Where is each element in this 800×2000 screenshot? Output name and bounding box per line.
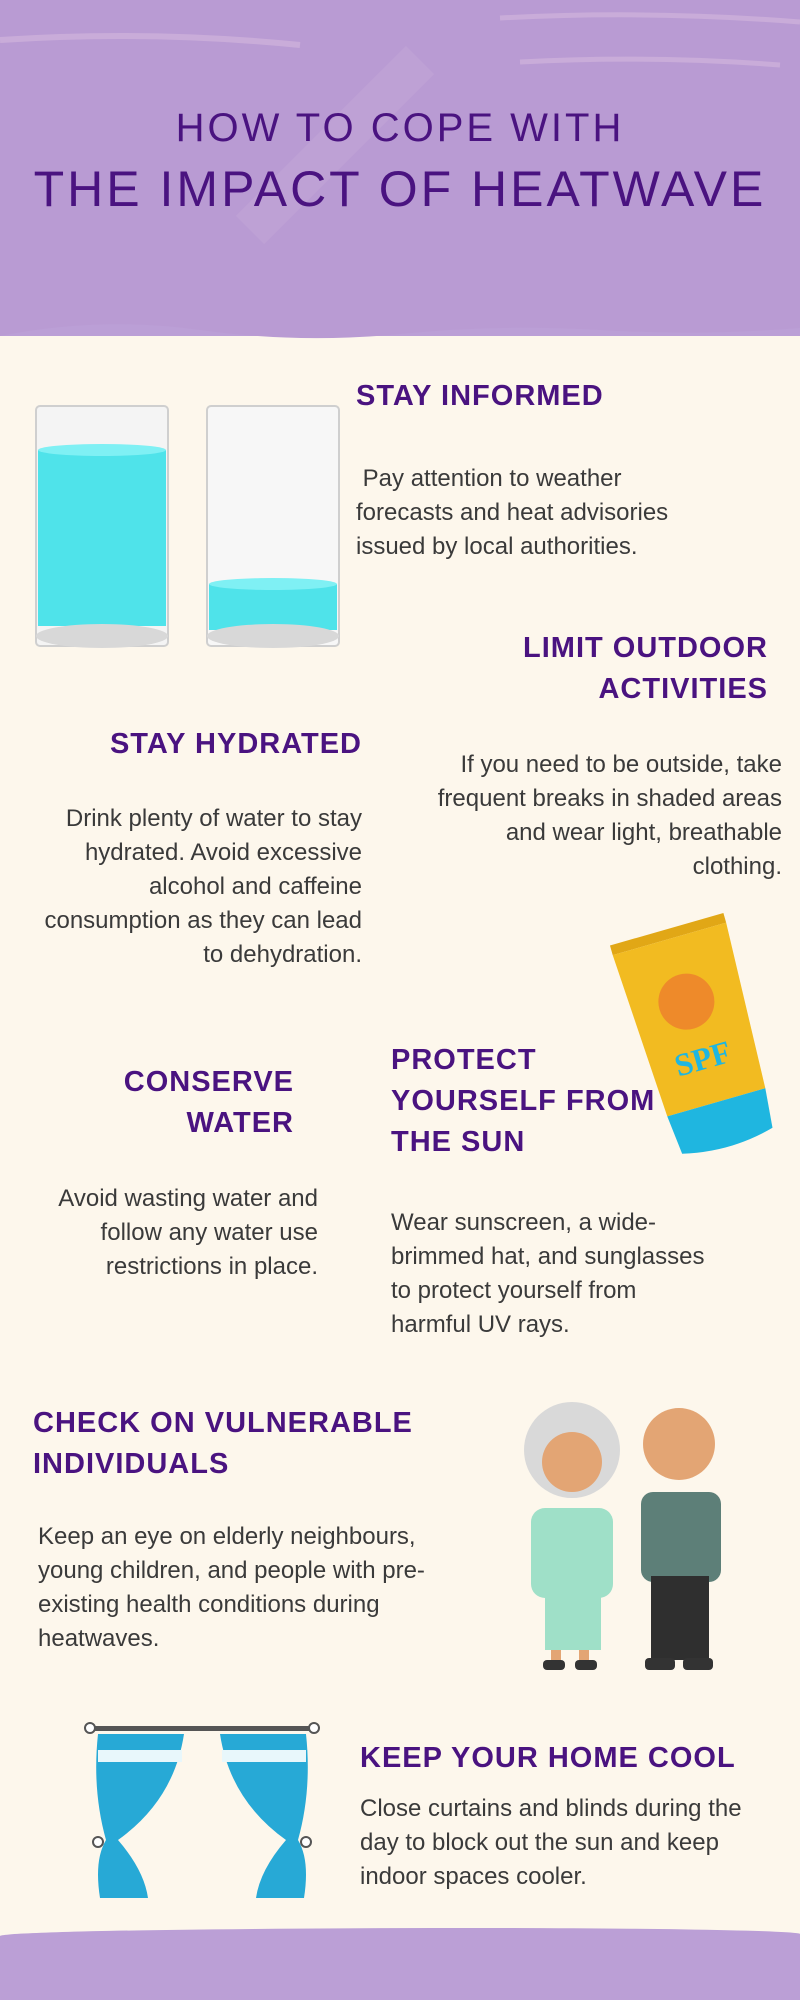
- text: stay informed: Pay attention to weather forecasts and heat advisories issued by local authorities.: [356, 465, 668, 560]
- heading: limit outdoor activities: LIMIT OUTDOOR ACTIVITIES: [523, 632, 768, 705]
- title: HOW TO COPE WITH: [176, 106, 624, 150]
- heading: protect yourself: PROTECT YOURSELF FROM THE SUN: [391, 1044, 655, 1158]
- text: vulnerable: Keep an eye on elderly neighbours, young children, and people with pre-existing health conditions during heatwaves.: [38, 1523, 425, 1652]
- heading: check on vulnerable: CHECK ON VULNERABLE INDIVIDUALS: [33, 1407, 413, 1480]
- icon: water glasses: [35, 405, 340, 648]
- text: home cool: Close curtains and blinds during the day to block out the sun and keep indoor spaces cooler.: [360, 1795, 742, 1890]
- heading: stay hydrated: STAY HYDRATED: [110, 728, 362, 760]
- text: stay hydrated: Drink plenty of water to stay hydrated. Avoid excessive alcohol and caffeine consumption as they can lead to dehydration.: [44, 805, 362, 968]
- icon: curtains: [84, 1722, 320, 1898]
- text: limit outdoor: If you need to be outside, take frequent breaks in shaded areas and wear light, breathable clothing.: [438, 751, 782, 880]
- text: protect: Wear sunscreen, a wide-brimmed hat, and sunglasses to protect yourself from harmful UV rays.: [391, 1209, 704, 1338]
- text: conserve water: Avoid wasting water and follow any water use restrictions in place.: [58, 1185, 318, 1280]
- footer band: [0, 1928, 800, 2000]
- icon: elderly couple: [524, 1402, 721, 1670]
- heading: keep home cool: KEEP YOUR HOME COOL: [360, 1742, 736, 1774]
- heading: conserve water: CONSERVE WATER: [124, 1066, 294, 1139]
- title: THE IMPACT OF HEATWAVE: [34, 161, 766, 217]
- title: [34, 106, 766, 217]
- heading: stay informed: STAY INFORMED: [356, 380, 604, 412]
- icon: spf sunscreen: [610, 913, 772, 1154]
- header band: [0, 0, 800, 336]
- icon: spf sunscreen: SPF: [670, 1033, 735, 1083]
